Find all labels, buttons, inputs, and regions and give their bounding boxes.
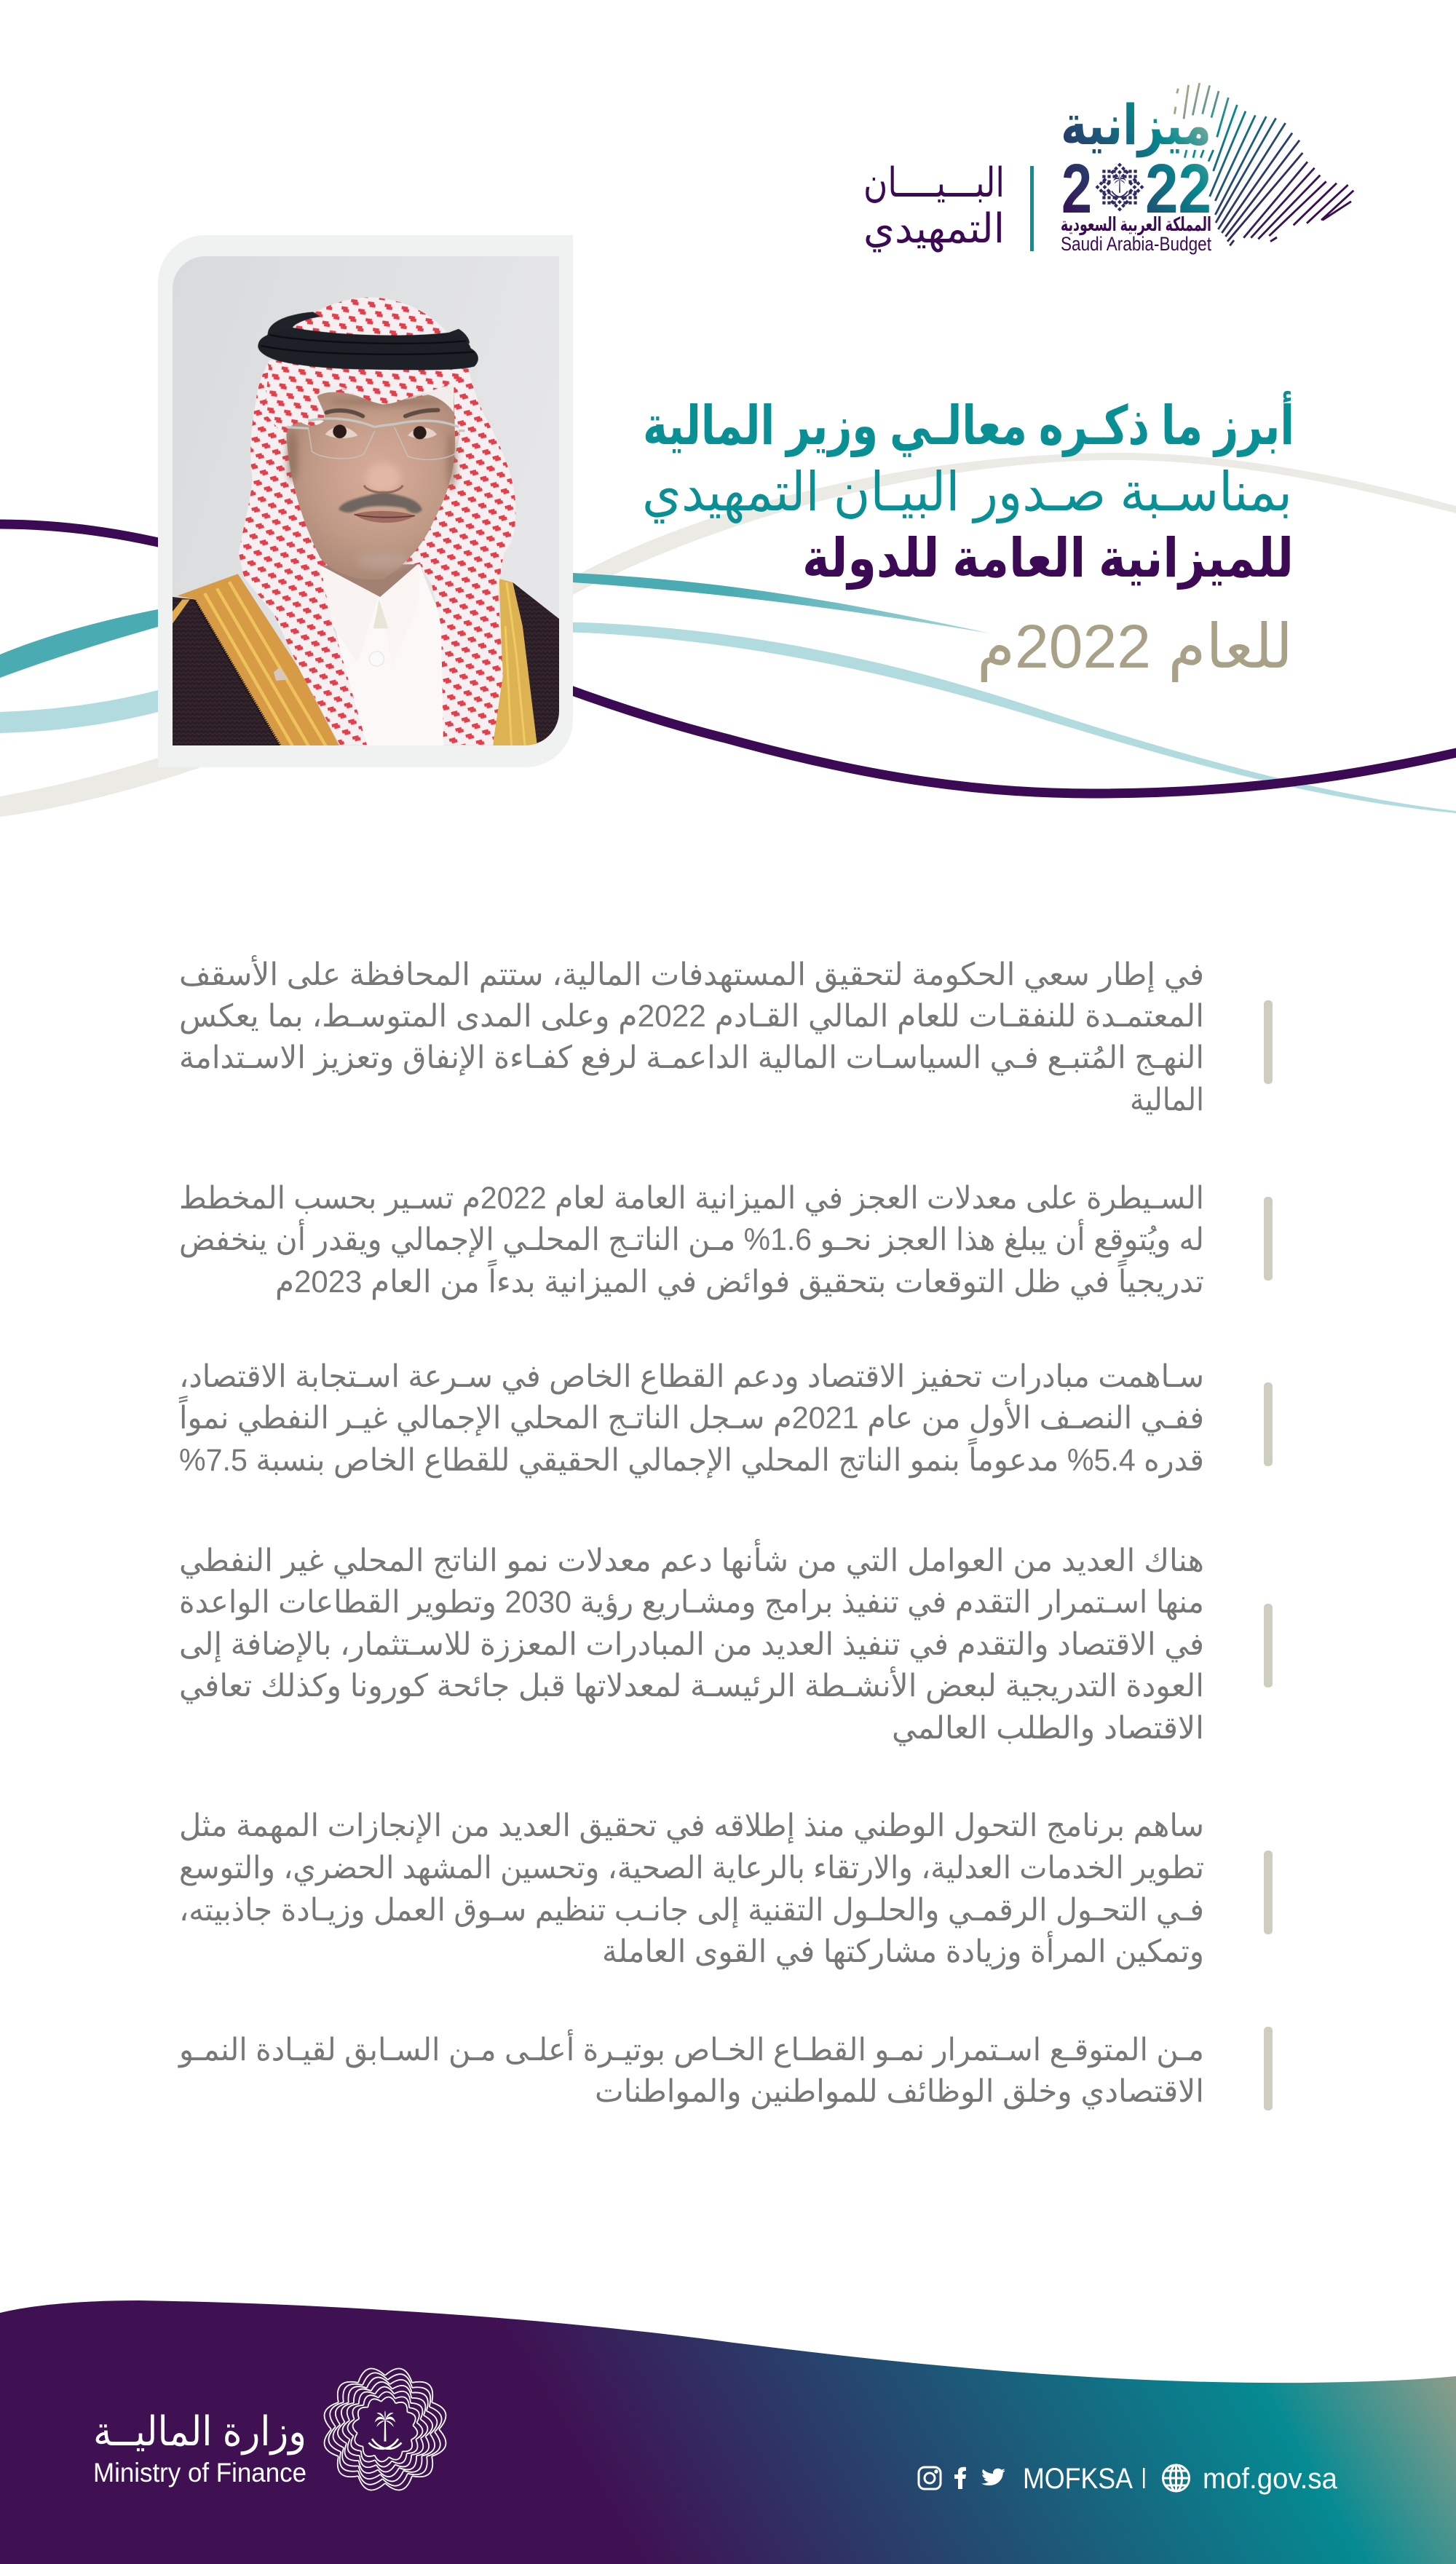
photo frame bbox=[158, 235, 573, 767]
face bbox=[286, 388, 455, 579]
paragraph 1 bbox=[179, 954, 1273, 1117]
handle: MOFKSA bbox=[1023, 2463, 1133, 2495]
logo: Budget 2022 bbox=[1061, 83, 1353, 255]
paragraph 2: السـيطرة على معدلات العجز في الميزانية العامة لعام 2022م تسـير بحسب المخطط bbox=[179, 1181, 1204, 1216]
paragraph 3: قدره 5.4% مدعوماً بنمو الناتج المحلي الإجمالي الحقيقي للقطاع الخاص بنسبة 7.5% bbox=[179, 1438, 1204, 1479]
paragraph 5: فـي التحـول الرقمـي والحلـول التقنية إلى جانـب تنظيم سـوق العمل وزيـادة جاذبيته، bbox=[179, 1893, 1204, 1928]
paragraph 6 bbox=[178, 2027, 1273, 2110]
paragraph 1: في إطار سعي الحكومة لتحقيق المستهدفات المالية، ستتم المحافظة على الأسقف bbox=[179, 954, 1204, 993]
icon: facebook bbox=[954, 2467, 966, 2489]
statement label: البـــيــــان bbox=[863, 159, 1005, 205]
statement label bbox=[863, 159, 1005, 253]
icon: globe bbox=[1163, 2465, 1190, 2491]
paragraph 4: هناك العديد من العوامل التي من شأنها دعم معدلات نمو الناتج المحلي غير النفطي bbox=[179, 1538, 1204, 1579]
agal bbox=[258, 312, 478, 370]
logo English line: Saudi Arabia-Budget bbox=[1061, 233, 1211, 255]
ghutra drapes bbox=[239, 360, 515, 745]
paragraph 2 bbox=[179, 1181, 1273, 1300]
paragraph 6: الاقتصادي وخلق الوظائف للمواطنين والمواطنات bbox=[595, 2074, 1204, 2110]
face shading bbox=[288, 396, 456, 569]
paragraph 4 bbox=[179, 1538, 1273, 1746]
logo year digits 22: 22 bbox=[1145, 150, 1211, 228]
paragraph 4: في الاقتصاد والتقدم في تنفيذ العديد من المبادرات المعززة للاسـتثمار، بالإضافة إلى bbox=[179, 1627, 1204, 1663]
moustache bbox=[339, 491, 422, 513]
portrait of the minister bbox=[173, 256, 559, 748]
divider next to logo bbox=[1030, 166, 1034, 251]
eyebrows bbox=[326, 410, 438, 416]
paragraph 2: له ويُتوقع أن يبلغ هذا العجز نحـو 1.6% مـن الناتـج المحلـي الإجمالي ويقدر أن ينخفض bbox=[179, 1219, 1204, 1258]
ministry name bbox=[93, 2408, 306, 2488]
emblem in year bbox=[1095, 163, 1144, 211]
paragraph 5 bbox=[179, 1808, 1273, 1970]
logo year digit 2: 2 bbox=[1061, 150, 1092, 228]
paragraph 5: ساهم برنامج التحول الوطني منذ إطلاقه في تحقيق العديد من الإنجازات المهمة مثل bbox=[179, 1808, 1204, 1844]
paragraph 5: وتمكين المرأة وزيادة مشاركتها في القوى العاملة bbox=[602, 1931, 1204, 1970]
paragraph 4: الاقتصاد والطلب العالمي bbox=[892, 1711, 1204, 1746]
white under-cloth bbox=[318, 384, 454, 413]
social and web links bbox=[919, 2463, 1338, 2495]
mouth bbox=[355, 511, 415, 523]
heading line 2: بمناسـبة صـدور البيـان التمهيدي bbox=[642, 462, 1292, 523]
paragraph 1: المالية bbox=[1130, 1083, 1204, 1117]
logo word: mizaniya: ميزانية bbox=[1061, 95, 1211, 158]
ministry name: Ministry of Finance bbox=[93, 2458, 306, 2488]
ghutra crown bbox=[295, 297, 447, 336]
robe, gold trim and shirt bbox=[173, 553, 559, 748]
icon: instagram bbox=[919, 2467, 941, 2489]
paragraph 1: النهـج المُتبـع فـي السياسـات المالية الداعمـة لرفع كفـاءة الإنفاق وتعزيز الاسـتدامة bbox=[179, 1040, 1204, 1076]
ministry name: وزارة الماليــة bbox=[93, 2408, 306, 2456]
heading line 4: للعام 2022م bbox=[977, 612, 1293, 682]
eyes bbox=[325, 424, 437, 439]
footer band bbox=[0, 2300, 1456, 2564]
paragraph 4: منها اسـتمرار التقدم في تنفيذ برامج ومشـاريع رؤية 2030 وتطوير القطاعات الواعدة bbox=[179, 1585, 1204, 1621]
logo Arabic kingdom line: المملكة العربية السعودية bbox=[1061, 213, 1211, 236]
paragraph 3 bbox=[178, 1359, 1273, 1479]
map stripes bbox=[1174, 83, 1353, 245]
forehead fold of ghutra bbox=[264, 360, 468, 437]
glasses bbox=[286, 419, 464, 459]
head: ghutra, agal and face bbox=[239, 297, 515, 745]
paragraph 3: سـاهمت مبادرات تحفيز الاقتصاد ودعم القطاع الخاص في سـرعة اسـتجابة الاقتصاد، bbox=[179, 1359, 1204, 1395]
decorative flowing curves bbox=[0, 453, 1456, 817]
icon: twitter bbox=[981, 2469, 1005, 2485]
paragraph 2: تدريجياً في ظل التوقعات بتحقيق فوائض في الميزانية بدءاً من العام 2023م bbox=[275, 1259, 1204, 1300]
paragraph 6: مـن المتوقـع اسـتمرار نمـو القطـاع الخـاص بوتيـرة أعلـى مـن السـابق لقيـادة النمـو bbox=[178, 2029, 1204, 2068]
icon: ministry emblem bbox=[319, 2363, 451, 2496]
paragraph 1: المعتمـدة للنفقـات للعام المالي القـادم 2022م وعلى المدى المتوسـط، بما يعكس bbox=[179, 999, 1204, 1034]
heading line 3: للميزانية العامة للدولة bbox=[802, 528, 1294, 590]
statement label: التمهيدي bbox=[863, 205, 1005, 253]
paragraph 3: ففـي النصـف الأول من عام 2021م سـجل الناتـج المحلي الإجمالي غيـر النفطي نمواً bbox=[178, 1396, 1204, 1436]
heading bbox=[642, 390, 1294, 682]
paragraph 5: تطوير الخدمات العدلية، والارتقاء بالرعاية الصحية، وتحسين المشهد الحضري، والتوسع bbox=[179, 1851, 1204, 1886]
website: mof.gov.sa bbox=[1203, 2463, 1338, 2495]
paragraph 4: العودة التدريجية لبعض الأنشـطة الرئيسـة لمعدلاتها قبل جائحة كورونا وكذلك تعافي bbox=[179, 1666, 1204, 1704]
nose shadow bbox=[364, 486, 403, 493]
